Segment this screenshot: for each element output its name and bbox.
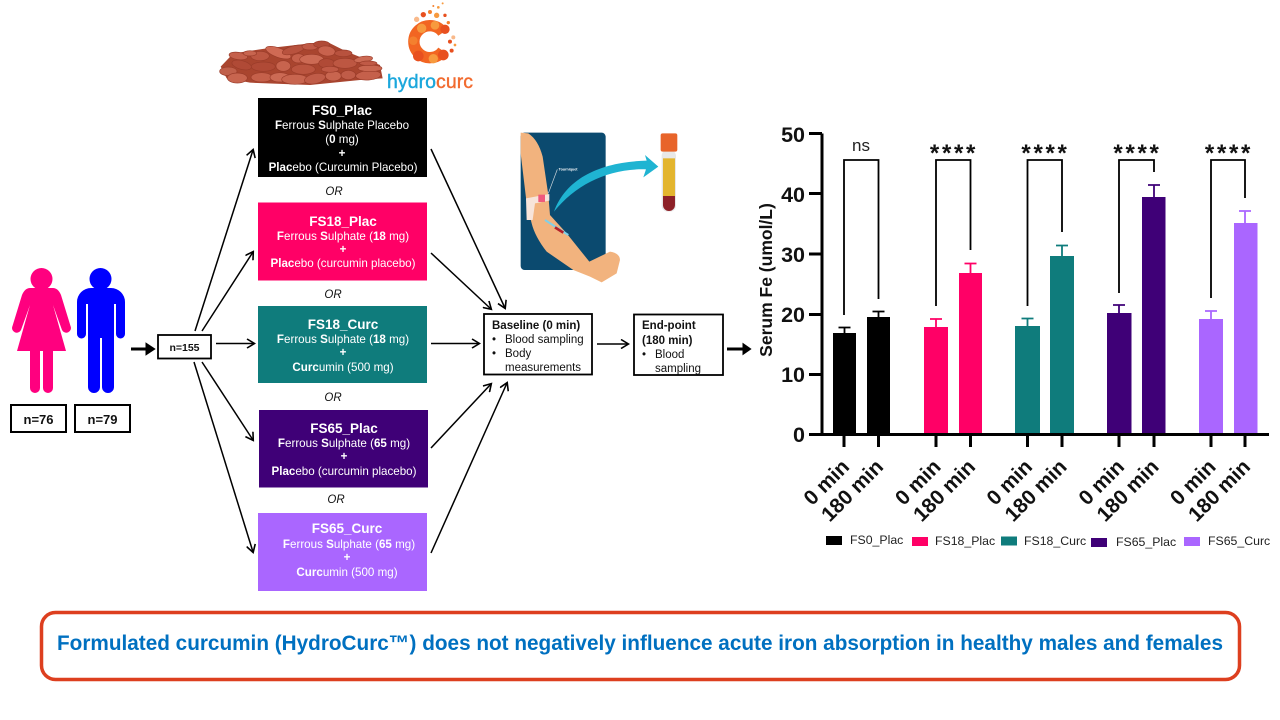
legend: FS65_Curc: [1208, 534, 1270, 548]
bars: FS0_Plac: [833, 312, 890, 434]
panel: FS0_Plac group: FS0_Plac: [312, 103, 373, 118]
x axis labels: [799, 455, 1255, 526]
illustration: blood draw from arm: [521, 133, 677, 282]
y axis title: Serum Fe (umol/L): [756, 203, 776, 357]
callout: conclusion: [42, 612, 1240, 680]
total sample box: [158, 335, 211, 358]
panel: baseline measurements: •: [492, 348, 496, 360]
significance labels: ****: [1205, 140, 1253, 167]
panel: baseline measurements: Blood sampling: [505, 334, 584, 346]
icon: male figure: [77, 268, 125, 393]
panel: baseline measurements: Baseline (0 min): [492, 320, 580, 332]
x axis labels: 0 min: [1166, 455, 1221, 510]
panel: FS18_Curc group: Ferrous Sulphate (18 mg): [277, 333, 409, 346]
panel: FS18_Plac group: [258, 202, 427, 280]
arrows: allocation to groups: [194, 150, 254, 552]
logo: hydrocurc: [387, 2, 473, 93]
bars: FS65_Plac: [1107, 185, 1166, 434]
label: OR: OR: [324, 392, 342, 404]
female count box: [11, 405, 66, 432]
arrows: groups to baseline: [431, 149, 507, 553]
female count box: n=76: [24, 412, 54, 427]
x axis labels: 180 min: [909, 455, 980, 526]
panel: FS18_Curc group: [258, 306, 427, 383]
panel: FS18_Plac group: FS18_Plac: [309, 214, 377, 229]
legend: [826, 533, 1270, 549]
panel: FS65_Plac group: Ferrous Sulphate (65 mg): [278, 437, 410, 450]
significance labels: ****: [930, 140, 978, 167]
bars: FS18_Plac: [924, 264, 982, 434]
panel: baseline measurements: •: [492, 334, 496, 346]
image: iron tablets pile: [220, 41, 383, 86]
legend: FS0_Plac: [850, 533, 903, 547]
y axis tick labels: 0: [793, 423, 805, 447]
panel: FS0_Plac group: Ferrous Sulphate Placebo: [275, 119, 409, 132]
bars: FS18_Curc: [1015, 246, 1074, 434]
panel: FS18_Curc group: Curcumin (500 mg): [292, 361, 394, 374]
panel: FS0_Plac group: (0 mg): [325, 133, 359, 146]
x axis labels: 180 min: [1001, 455, 1072, 526]
icon: female figure: [12, 268, 71, 393]
male count box: [75, 405, 130, 432]
significance brackets: [844, 160, 1245, 315]
y axis tick labels: 50: [781, 123, 805, 147]
panel: FS65_Curc group: Curcumin (500 mg): [296, 566, 398, 579]
panel: FS65_Plac group: [259, 410, 428, 488]
label: OR: OR: [327, 494, 345, 506]
label: OR: OR: [324, 289, 342, 301]
panel: FS18_Curc group: +: [340, 346, 347, 359]
bars: FS65_Curc: [1199, 211, 1258, 434]
panel: FS65_Plac group: FS65_Plac: [310, 421, 378, 436]
x axis labels: 180 min: [817, 455, 888, 526]
significance labels: ****: [1113, 140, 1162, 167]
y axis tick labels: 10: [781, 363, 805, 387]
panel: FS0_Plac group: +: [339, 147, 346, 160]
legend: FS18_Curc: [1024, 534, 1086, 548]
axes and ticks: [809, 134, 1269, 447]
callout: conclusion: Formulated curcumin (HydroCurc™) does not negatively influence acute iron absorption in healthy males and females: [57, 632, 1223, 655]
y axis tick labels: 30: [781, 243, 805, 267]
significance labels: ns: [852, 136, 870, 155]
y axis tick labels: [781, 123, 805, 447]
panel: FS0_Plac group: Placebo (Curcumin Placebo): [269, 161, 418, 174]
panel: end-point measurements: End-point: [642, 320, 696, 332]
panel: baseline measurements: Body: [505, 348, 531, 360]
panel: FS65_Curc group: Ferrous Sulphate (65 mg): [283, 538, 415, 551]
label: OR: OR: [325, 186, 343, 198]
panel: end-point measurements: sampling: [655, 363, 701, 375]
significance labels: [852, 136, 1253, 167]
x axis labels: 0 min: [982, 455, 1037, 510]
male count box: n=79: [88, 412, 118, 427]
panel: end-point measurements: (180 min): [642, 335, 693, 347]
x axis labels: 0 min: [1074, 455, 1129, 510]
logo: hydrocurc: hydrocurc: [387, 71, 473, 93]
significance labels: ****: [1021, 140, 1070, 167]
panel: end-point measurements: [634, 314, 723, 375]
panel: FS18_Plac group: +: [340, 243, 347, 256]
x axis labels: 0 min: [799, 455, 854, 510]
arrow: end-point to chart: [727, 346, 749, 352]
panel: FS18_Plac group: Ferrous Sulphate (18 mg): [277, 230, 409, 243]
legend: FS65_Plac: [1116, 535, 1176, 549]
panel: FS65_Curc group: +: [344, 551, 351, 564]
panel: FS65_Curc group: [258, 513, 427, 591]
panel: FS65_Curc group: FS65_Curc: [312, 521, 383, 536]
panel: FS65_Plac group: +: [341, 450, 348, 463]
panel: end-point measurements: •: [642, 349, 646, 361]
bar chart: serum iron: [756, 123, 1269, 526]
arrow: participants to total: [131, 345, 153, 353]
panel: FS65_Plac group: Placebo (curcumin placebo): [271, 465, 417, 478]
illustration: blood draw from arm: Tourniquet: [559, 167, 578, 171]
legend: FS18_Plac: [935, 534, 995, 548]
panel: FS18_Curc group: FS18_Curc: [308, 317, 379, 332]
y axis tick labels: 20: [781, 303, 805, 327]
x axis labels: 180 min: [1184, 455, 1255, 526]
panel: end-point measurements: Blood: [655, 349, 684, 361]
x axis labels: 0 min: [891, 455, 946, 510]
y axis tick labels: 40: [781, 183, 805, 207]
panel: FS18_Plac group: Placebo (curcumin placebo): [270, 257, 416, 270]
x axis labels: 180 min: [1093, 455, 1164, 526]
panel: baseline measurements: [484, 314, 592, 374]
panel: FS0_Plac group: [258, 98, 427, 177]
arrow: baseline to end-point: [597, 343, 628, 345]
panel: baseline measurements: measurements: [505, 362, 581, 374]
total sample box: n=155: [169, 342, 200, 354]
